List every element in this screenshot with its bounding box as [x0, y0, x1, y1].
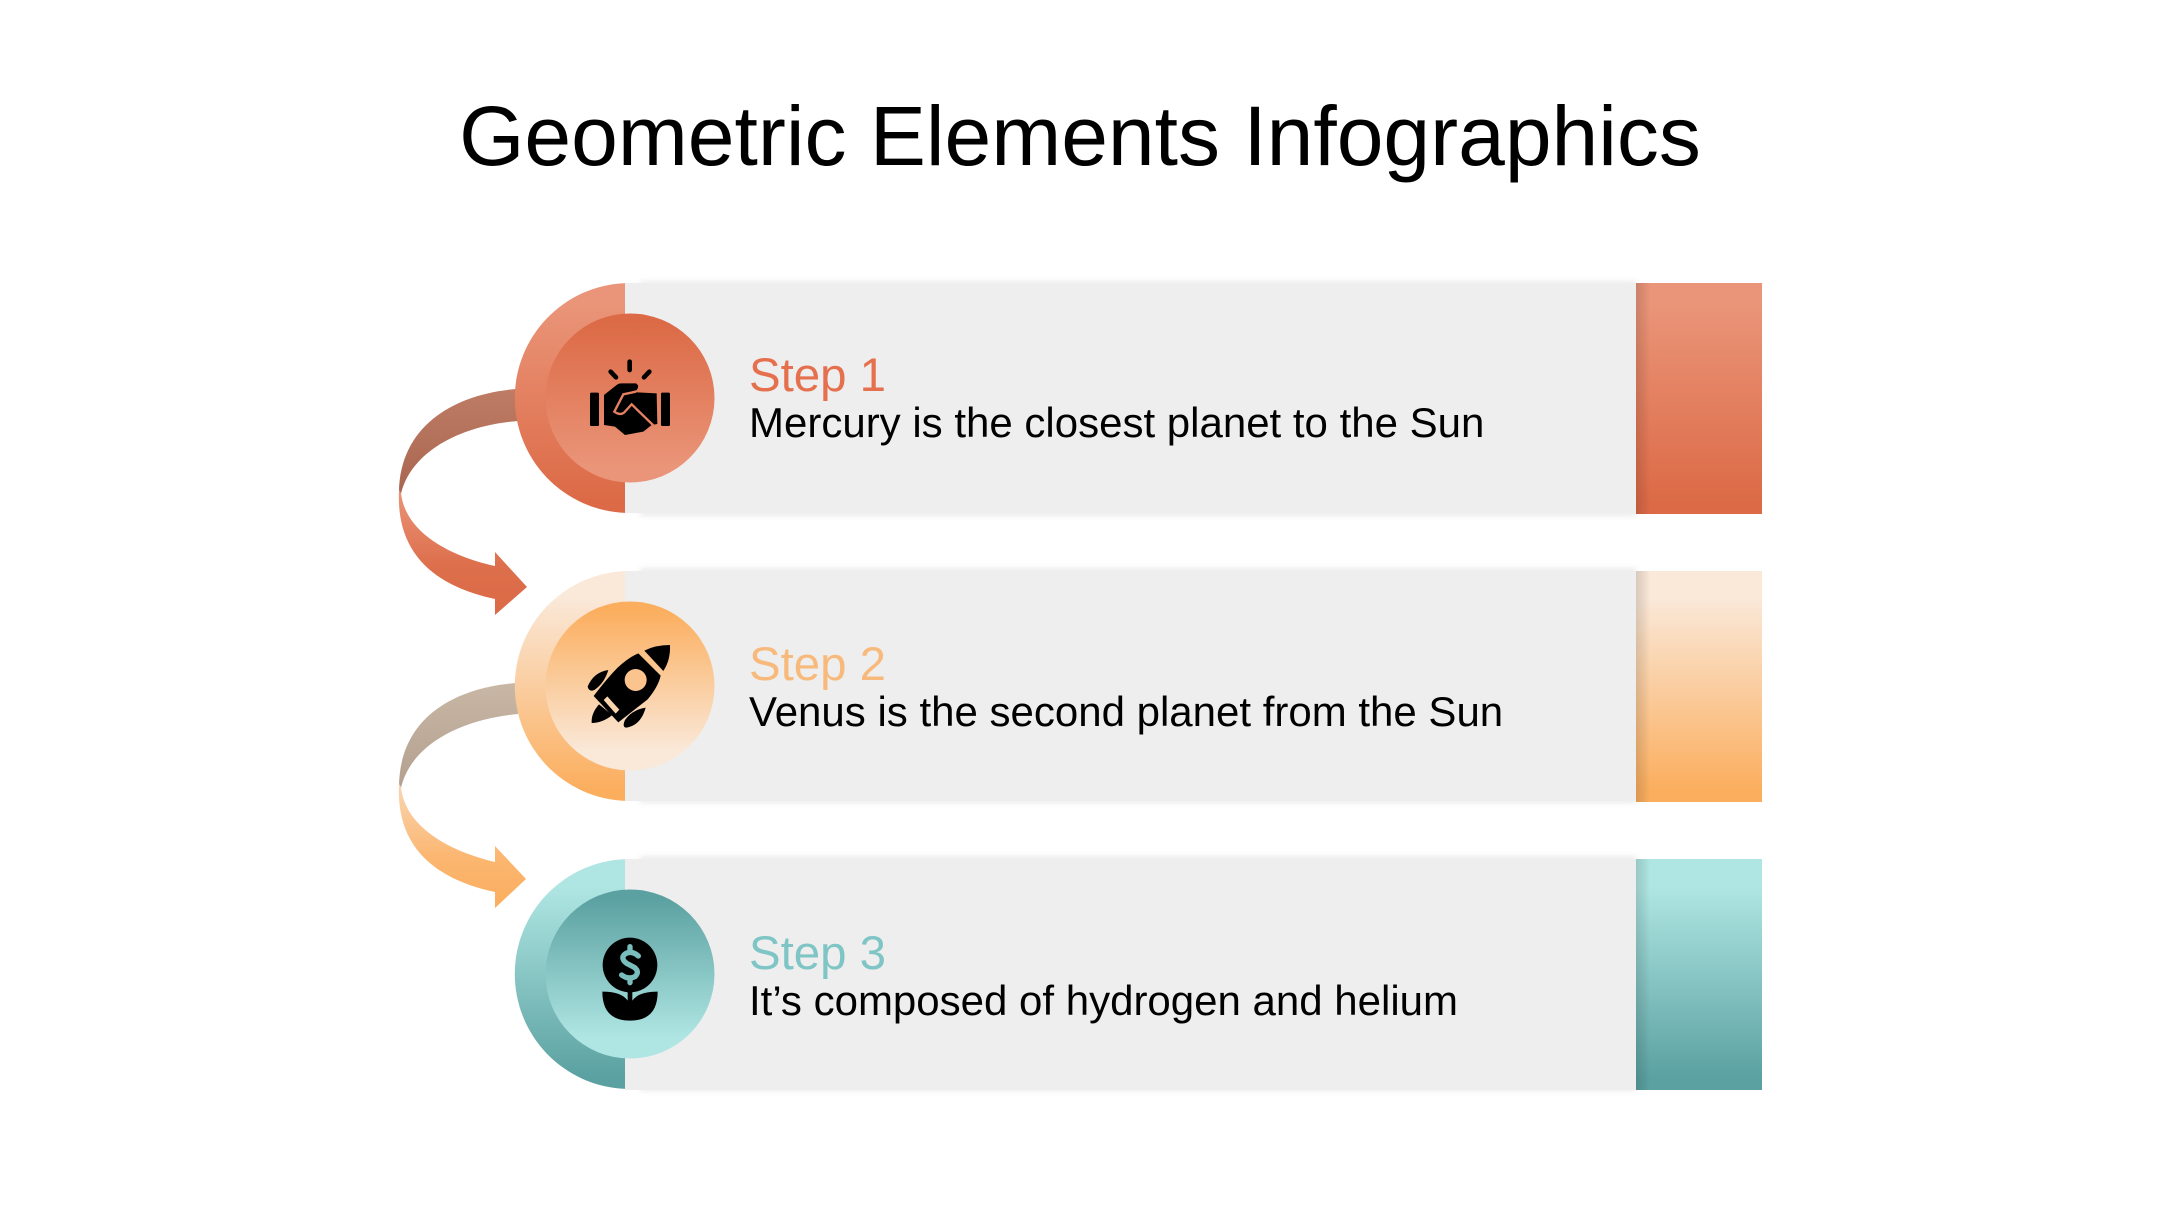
- inner circle: step 1: [546, 314, 714, 482]
- arrow: step 2 to step 3: [399, 683, 526, 908]
- inner circle: step 2: [546, 602, 714, 770]
- text: step 3: [749, 927, 1458, 1024]
- text: step 2: [749, 638, 1503, 735]
- outer half circle: step 2: [515, 571, 625, 801]
- panel: step 2: [515, 568, 1762, 803]
- icon: rocket: [588, 645, 670, 728]
- text: step 1: [749, 349, 1484, 446]
- text: step 2: Step 2: [749, 638, 886, 691]
- outer half circle: step 1: [515, 283, 625, 513]
- text: step 1: Step 1: [749, 349, 886, 402]
- text: step 2: Venus is the second planet from the Sun: [749, 688, 1503, 735]
- icon: handshake: [590, 362, 670, 435]
- arrow: step 1 to step 2: [399, 389, 527, 615]
- inner circle: step 3: [546, 890, 714, 1058]
- text: step 3: It’s composed of hydrogen and helium: [749, 977, 1458, 1024]
- icon: money plant: [602, 938, 658, 1021]
- color bar: step 1: [1636, 283, 1762, 514]
- panel: step 1: [515, 281, 1762, 516]
- title: Geometric Elements Infographics: [459, 89, 1701, 183]
- color bar: step 3: [1636, 859, 1762, 1090]
- panel: step 3: [515, 856, 1762, 1091]
- color bar: step 2: [1636, 571, 1762, 802]
- text: step 3: Step 3: [749, 927, 886, 980]
- outer half circle: step 3: [515, 859, 625, 1089]
- text: step 1: Mercury is the closest planet to the Sun: [749, 399, 1484, 446]
